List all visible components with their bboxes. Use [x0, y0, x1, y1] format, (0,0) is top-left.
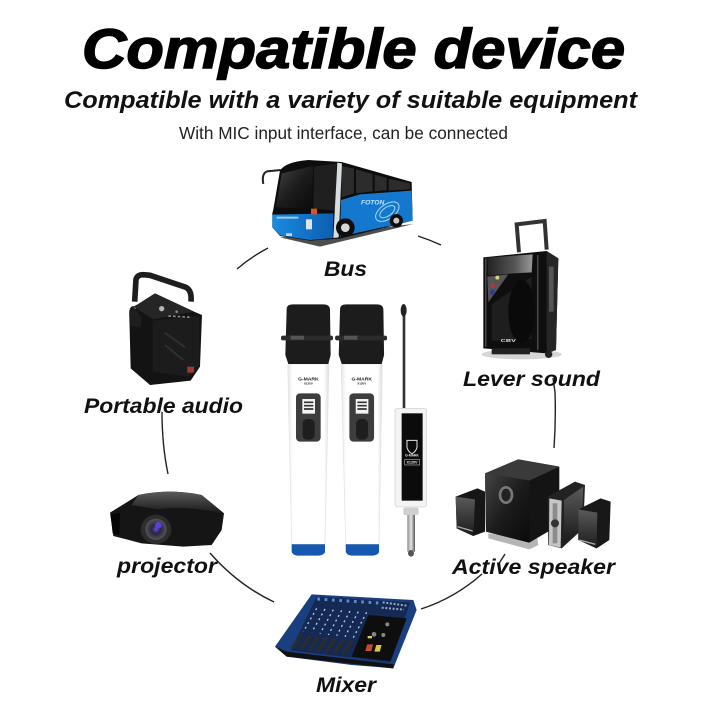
icon: active speaker set — [456, 459, 611, 549]
receiver brand: G-MARK — [405, 454, 419, 458]
title: Compatible device — [82, 17, 625, 80]
label: Mixer: Mixer — [316, 674, 378, 697]
icon: mixer — [275, 594, 417, 668]
label: Active speaker: Active speaker — [451, 556, 617, 579]
bus logo text: FOTON — [361, 201, 385, 207]
description line: With MIC input interface, can be connected — [179, 123, 508, 143]
label: Lever sound: Lever sound — [463, 368, 601, 391]
icon: wireless microphone right — [335, 304, 387, 556]
model: X120V — [357, 382, 366, 386]
speaker brand text: CBV — [501, 338, 517, 344]
label: Bus: Bus — [324, 258, 367, 281]
icon: portable audio — [129, 275, 202, 385]
connecting ring arcs — [162, 236, 555, 609]
receiver model: X120V — [406, 461, 418, 465]
brand: G-MARK — [298, 376, 319, 382]
icon: projector — [110, 492, 224, 547]
icon: bus — [263, 160, 413, 247]
model: X120V — [304, 382, 313, 386]
label: Portable audio: Portable audio — [84, 395, 243, 418]
subtitle: Compatible with a variety of suitable equipment — [64, 87, 638, 114]
brand: G-MARK — [351, 376, 372, 382]
label: projector: projector — [116, 555, 219, 578]
icon: lever sound trolley speaker — [482, 221, 562, 359]
icon: wireless receiver — [395, 304, 427, 557]
icon: wireless microphone left — [281, 304, 333, 556]
